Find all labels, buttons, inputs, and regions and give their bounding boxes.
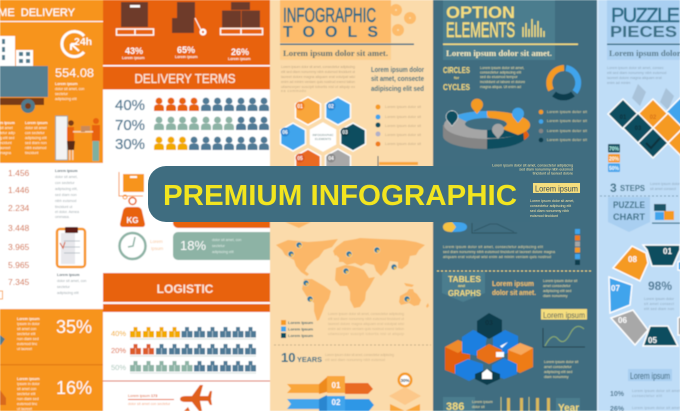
text block: top right of banner: tincidunt ut laoreet dolore [533,172,573,176]
stats: bottom percentages: consectetur elit [632,394,662,398]
chart: people pictograms: 30% [115,136,145,153]
stat: 35%: 35% [56,317,92,337]
legend: step percentages: 50% [609,166,620,172]
stats: percentages: Lorem ipsum [175,55,198,59]
text block: columns: ncidunt [0,141,12,145]
heading: 3 steps: STEPS [620,184,646,193]
legend: map: Lorem Ipsum [288,333,314,338]
stats: bottom percentages: 10% [610,391,625,398]
text block: adipiscing elit [55,97,77,101]
panel: delivery terms and logistic [103,0,283,411]
text block: sectetur [55,92,69,96]
callout bar: orange [173,205,283,228]
title: infographic tools: TOOLS [283,24,378,41]
legend: bullets: Lorem ipsum dolor sit [385,115,421,119]
stats: bottom percentages [610,389,680,411]
legend: map: Lorem Ipsum [288,320,314,325]
stat: 35%: Lorem ipsum [17,317,40,321]
caption: clock: Lorem [150,239,163,244]
text block: map: ullamcorper suscipit lobortis nisl ut aliquip [328,332,404,336]
heading: year [556,398,580,411]
stats: percentages: 43% [125,46,143,56]
text block: graphs [543,279,577,298]
icon: airplanes [180,385,212,411]
legend: ring: Lorem ipsum dolor sit [547,129,587,133]
text block: steps: Lorem ipsum dolor [650,182,680,186]
title: option elements: ELEMENTS [446,19,515,42]
chart: puzzle octagon: 08 [628,255,637,264]
text block: intro: enim ad minim [607,81,630,85]
banner title: PREMIUM INFOGRAPHIC [163,180,517,212]
text block: middle [443,245,555,259]
icon: gears [392,6,414,34]
callout: 18%: 18% [180,238,206,253]
text block: list description [55,169,79,219]
text block: columns: con sectetur [25,131,45,135]
label: lorem ipsum [628,369,672,381]
text block: columns: Lorem ipsum [25,121,48,125]
text block: lower: amet consectetur [544,365,572,369]
value: 554.08: 554.08 [55,66,94,80]
text block: columns: tetur adip [0,131,15,135]
text block: steps [650,182,680,191]
text block: intro: enim ad minim veniam quis nostrud exerci tation [281,80,355,84]
list of numbers: 3.448 [8,223,30,233]
heading: 3 steps: 3 [610,181,617,195]
chart: donut [549,68,578,97]
stat: 16%: euismod tinc [17,402,37,406]
text block: dolor sit amet, con [55,87,84,91]
panel: infographic tools [270,0,433,411]
text block: columns: g elit sed [0,136,14,140]
text block: columns: nibh euismod [25,146,46,150]
heading: puzzle chart: CHART [613,212,645,223]
text block: columns: tincidunt [25,151,38,155]
panel: puzzle pieces [597,0,680,411]
text block: steps: sit amet consect [650,187,676,191]
chart: hexagons: 01 [297,104,303,110]
stats: percentages: Lorem ipsum [228,57,251,61]
stat: 98%: 98% [648,279,672,293]
text block: list description: ommasa. [55,215,70,219]
icon: 24h clock [62,31,92,56]
chart: box pictograms: 50% [111,363,126,372]
text block: flight [128,394,174,406]
chart: hexagons [280,97,366,177]
heading: circles for cycles: CYCLES [443,82,470,92]
badge: 30%: 30% [400,378,410,383]
heading: tables and graphs: and [458,283,466,288]
text block: list description: Lorem ipsum [55,169,78,173]
icon: clipboard [57,227,85,267]
icon: isometric cubes: 03 [485,320,493,327]
text block: clipboard caption [57,273,86,295]
chart: diamond steps: 01 [620,115,627,121]
stat: 386 [443,397,475,411]
heading: tables and graphs: GRAPHS [448,289,482,298]
text block: graphs: Lorem ipsum dolor sit [543,279,577,283]
text block: columns: dolor sit amet [25,126,47,130]
title: puzzle pieces: PUZZLE [611,5,680,27]
list of numbers: 1.456 [8,168,30,178]
chart: puzzle octagon: 06 [618,316,627,325]
stat: 35%: euismod tinc [17,342,37,346]
text block: columns: aoreet [0,146,10,150]
icon: isometric cubes [445,313,533,385]
chart: puzzle octagon: 05 [648,336,657,345]
icon: delivery scene [56,116,100,161]
text block: list description: tincidunt ut [55,205,72,209]
text block: top right of banner: sed diam nonummy nibh euismod [519,168,573,172]
icon: puzzle [652,204,680,224]
list of numbers: 1.446 [8,185,30,195]
icon: boxes on pallets [116,2,262,36]
chart: people pictograms: 70% [115,117,145,134]
text block: intro: Lorem ipsum dolor sit amet, consectetur adipiscing [281,65,355,69]
text block: intro: Lorem ipsum dolor sit amet, consec [607,66,664,70]
legend: bullets: Lorem ipsum dolor sit [385,133,421,137]
stat: 35%: non diam sed [17,337,39,341]
chart: puzzle octagon: 01 [663,247,672,256]
text block: cycles: consectetur adipiscing elit [480,70,521,74]
text block: chart note: sit amet consect [644,302,674,306]
legend: colour squares [575,229,580,265]
callout: 18%: adipiscing elit [212,250,234,254]
text block: list description: nibh euismod [55,199,76,203]
caption: clock: Ipsum [151,246,164,251]
text block: lower: diam nonummy [544,375,569,379]
text block: cycles: sed do eiusmod tempor [480,75,518,79]
chart: puzzle octagon: 07 [611,284,620,293]
legend: ring: Lorem ipsum dolor sit [547,138,587,142]
text block: under label: euismod tincidunt [530,214,558,218]
panel: tables and graphs lower section [437,222,592,411]
chart: box pictograms: 20% [111,346,126,355]
text block: map [328,312,404,336]
text block: bottom: dolor sit [472,405,485,409]
heading: logistic: LOGISTIC [157,282,214,296]
text block: graphs: diam nonummy [543,294,568,298]
text block: columns [0,121,48,155]
stat: 35% [0,317,92,351]
heading: 10 years [281,350,322,365]
callout: 18%: dolor sit amet, con [212,238,241,242]
text block: clipboard caption: dolor sit amet, con [57,279,86,283]
heading: logistic [103,273,270,302]
chart: hexagons: 03 [342,130,348,136]
heading: circles for cycles [443,65,470,92]
caption: clock [150,239,164,251]
chart: axis line [472,223,517,233]
stat: 35%: sectetur elit [17,332,35,336]
heading: circles for cycles: for [454,75,460,80]
text block: columns: magna [0,151,11,155]
callout: 18% [173,232,270,260]
text block: lower: adipiscing elit sed [544,370,572,374]
text block: teal note [371,65,424,93]
heading: circles for cycles: CIRCLES [443,65,470,75]
stat: 16%: Lorem ipsum [17,377,40,381]
text block: teal note: adipiscing elit sed [371,84,424,93]
stat: 16%: ut laoreet [17,407,32,411]
badge: 30% [389,372,421,411]
text block: teal note: sit amet, consecte [371,74,424,83]
legend: step percentages: 20% [609,156,620,162]
stat: 35%: sit amet con [17,327,36,331]
icon: cart box [119,172,144,199]
text block: clipboard caption: sectetur [57,285,71,289]
text block: map: Lorem ipsum dolor sit amet, consectetur adipiscing [328,312,404,316]
title: infographic tools: INFOGRAPHIC [283,5,376,27]
text block: lower [544,360,578,379]
legend: map [281,320,314,338]
stats: percentages: Lorem ipsum [122,56,145,60]
text block: middle: Lorem ipsum dolor sit amet, consectetur adipiscing elit [443,245,543,249]
title: infographic tools: Lorem ipsum dolor sit amet. [283,48,388,58]
text: lorem ipsum subheading: Lorem ipsum [492,279,534,288]
chart: 3d ring [443,99,530,149]
stat: 16%: sectetur elit [17,392,35,396]
chart: box pictograms [111,327,256,373]
text block: bottom: Lorem ipsum [472,400,493,404]
text block: Lorem ipsum [55,82,78,86]
text block: chart note: Lorem ipsum dolor [644,297,675,301]
text block: intro: laoreet dolore magna aliquam erat volutpat wisi [281,75,355,79]
text block: intro: laoreet dolore magna aliquam erat [607,76,662,80]
legend: bullets: Lorem ipsum dolor sit [385,142,421,146]
chart: hexagons: 02 [328,104,334,110]
stat: 16%: non diam sed [17,397,39,401]
chart: hexagons: INFOGRAPHIC [312,133,334,137]
text block: cycles: magna aliqua. Ut enim ad [480,85,521,89]
text block: intro: ea commodo [281,89,306,93]
title: option elements: Lorem ipsum dolor sit amet. [446,48,552,58]
text block: graphs: adipiscing elit sed [543,289,571,293]
text block: intro [607,66,666,85]
icon: truck and buildings [0,36,48,113]
stats: bottom percentages: Lorem ipsum dolor sit amet [632,389,680,393]
text block: columns: m ipsum [0,121,15,125]
stat: 16%: Ipsum in dolor [17,382,40,386]
text block: cycles: Lorem ipsum dolor sit amet, [480,66,524,70]
text block: flight: Lorem ipsum 173 [128,394,157,398]
stats: percentages [122,45,251,61]
text block: clipboard caption: Lorem ipsum [57,273,80,277]
text block: list description: et dolor. Aenea [55,210,79,214]
stat: 16% [0,377,92,411]
ribbon: 02 [287,395,374,411]
stats: percentages: 26% [231,47,249,57]
heading: 10 years: YEARS [297,357,322,364]
panel: option elements [433,0,597,411]
list of numbers [8,168,30,287]
legend: bullets: Lorem ipsum dolor sit [385,105,421,109]
stats: percentages: 65% [177,45,195,55]
list of numbers: 5.965 [8,260,30,270]
text block: teal note: Lorem ipsum dolor [371,65,424,74]
legend: ring [539,110,587,142]
text block: cycles: incididunt ut labore et dolore [480,80,525,84]
legend: bullets [376,104,421,146]
text block: intro: elit sed diam nonummy nibh euismod tincidunt ut [281,70,355,74]
legend: ring: Lorem ipsum dolor sit [547,119,587,123]
chart: diamond steps: 03 [635,126,642,132]
text block: under label [530,199,574,218]
chart: people pictograms: 40% [115,97,145,114]
text block [55,82,84,101]
label: lorem ipsum: Lorem ipsum [535,184,578,194]
text block: list description: sed diam non [55,193,77,197]
list of numbers: 3.965 [8,242,30,252]
text block: lower: Lorem ipsum dolor sit [544,360,578,364]
text block: list description: adipiscing elit, [55,187,78,191]
map: world [276,222,429,321]
chart: diamond steps [608,84,680,158]
stat: 35%: ut laoreet [17,347,32,351]
text block: map: elit sed diam nonummy nibh euismod tincidunt ut [328,317,404,321]
text block: intro [281,65,355,93]
title: infographic tools [280,0,414,60]
text block: columns: adipiscing elit [25,136,47,140]
chart: people pictograms [115,97,269,153]
text block: chart note: elit sed diam non [644,307,674,311]
text block: top right of banner [492,164,573,176]
text block: under label: Lorem ipsum dolor sit amet, [530,199,574,203]
text block: map: laoreet dolore magna aliquam erat volutpat wisi [328,322,404,326]
text block: list description: dolor sit amet, [55,175,78,179]
chart: hexagons: 06 [282,130,288,136]
heading: puzzle chart: PUZZLE [613,200,645,210]
text block: years [325,353,394,362]
legend: bullets: Lorem ipsum dolor sit [385,124,421,128]
legend: ring: Lorem ipsum dolor sit [547,110,587,114]
heading: delivery terms: DELIVERY TERMS [134,72,236,86]
ribbon: 01: 01 [332,381,341,390]
text block: flight: dolor sit amet con sectetur [128,402,171,406]
text block: top right of banner: Lorem ipsum dolor sit amet, consectetur adipiscing [492,164,573,168]
text block: columns: sed diam non [25,141,47,145]
title: puzzle pieces: PIECES [610,24,677,41]
heading: tables and graphs: TABLES [448,275,482,284]
stat: 35%: Ipsum in dolor [17,322,40,326]
icon: 24h clock: 24h [74,36,92,48]
legend: map: Lorem Ipsum [288,326,314,332]
dividers and vertical labels [501,397,550,411]
banner [148,164,580,222]
text block: map: enim ad minim veniam quis nostrud exerci tation [328,327,404,331]
icon: kg weight [120,198,145,227]
stat: 16%: 16% [56,378,92,398]
text block: middle: sed diam nonummy nibh euismod tincidunt ut laoreet dolore magna [443,250,555,254]
text block: years: Lorem ipsum dolor sit amet, consectetur adipiscing [325,353,394,357]
icon: kg weight: KG [126,216,138,225]
text block: under label: consectetur adipiscing elit [530,204,571,208]
heading: tables and graphs [442,272,485,302]
title: option elements: OPTION [446,3,515,22]
text block: intro: elit sed diam nonummy nibh euismod [607,71,666,75]
title: option elements [443,0,578,60]
text block: cycles [480,66,525,89]
ribbon: 02: 02 [332,398,341,407]
title: puzzle pieces [607,0,680,60]
chart: diamond steps: 02 [650,115,657,121]
text block: years: elit sed diam nonummy nibh euismod [325,358,385,362]
stats: bottom percentages: Lorem ipsum dolor sit amet [632,406,680,410]
heading: 3 steps [610,181,646,195]
stat: 16%: sit amet con [17,387,36,391]
chart: hexagons: ELEMENTS [315,137,331,141]
chart: hexagons: 04 [328,156,334,162]
text block: columns: sit amet [0,126,13,130]
ribbon: 01 [287,376,373,394]
chart: line graph [543,326,585,347]
text: lorem ipsum subheading: dolor sit amet. [492,288,536,297]
legend: step percentages [608,144,620,172]
icon: clock [120,233,146,259]
text block: middle: aliquam erat volutpat wisi enim ad minim veniam quis nostrud [443,255,551,259]
heading: puzzle chart [608,197,650,232]
text block: under label: sed diam nonummy nibh [530,209,569,213]
panel: time delivery [0,0,103,411]
text block: intro: ullamcorper suscipit lobortis nisl ut aliquip ex [281,85,355,89]
list of numbers: 2.234 [8,203,30,213]
chart: small bar [378,156,418,167]
text: lorem ipsum subheading [492,279,536,297]
text block: bottom [472,400,493,409]
text block: chart note [644,297,675,311]
chart: box pictograms: 40% [111,329,126,338]
text block: clipboard caption: adipiscing elit [57,291,79,295]
chart: hexagons: 05 [297,156,303,162]
chart: puzzle octagon [609,245,680,346]
text block: list description: con sectetur [55,181,75,185]
list of numbers: 7.345 [8,277,30,287]
callout: 18%: sectetur [212,244,226,248]
heading: 10 years: 10 [281,350,295,365]
legend: step percentages: 70% [609,146,620,152]
text block: graphs: amet consectetur [543,284,571,288]
label: lorem ipsum: Lorem ipsum [543,310,585,320]
